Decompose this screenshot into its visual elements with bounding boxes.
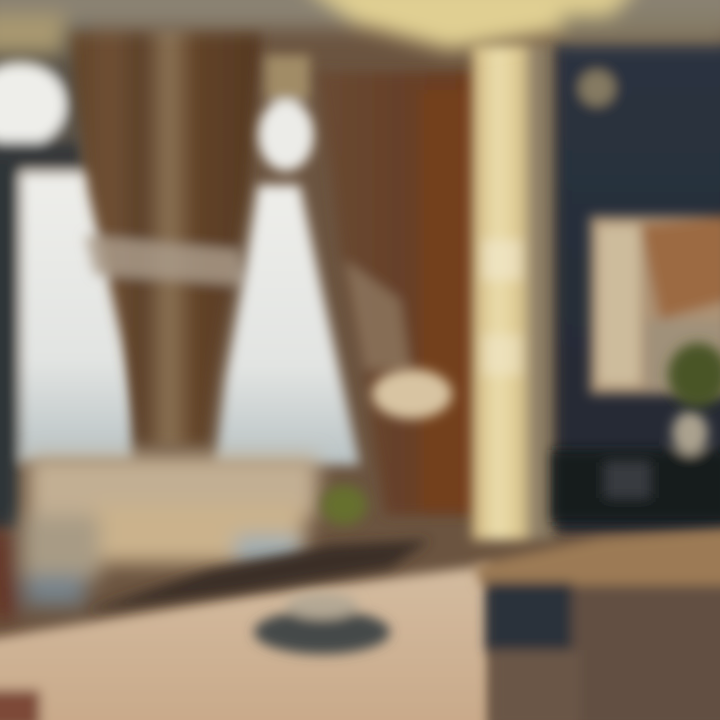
ceiling <box>0 0 720 54</box>
centre window <box>215 55 360 465</box>
dark coffee table <box>85 540 430 612</box>
dark sideboard and vase <box>552 411 720 522</box>
lamp <box>372 369 452 419</box>
framed picture <box>590 215 720 394</box>
left window with arch and frame <box>0 0 132 530</box>
floor <box>0 565 490 720</box>
side plant on the table <box>321 485 367 525</box>
sofa <box>0 455 318 620</box>
left curtain <box>68 28 262 445</box>
right armchair and sofa <box>475 528 720 720</box>
plant by the picture <box>668 343 720 407</box>
dark navy wall <box>556 42 720 532</box>
tray with objects <box>254 593 390 654</box>
right curtain <box>318 72 475 515</box>
cream column <box>472 45 556 540</box>
